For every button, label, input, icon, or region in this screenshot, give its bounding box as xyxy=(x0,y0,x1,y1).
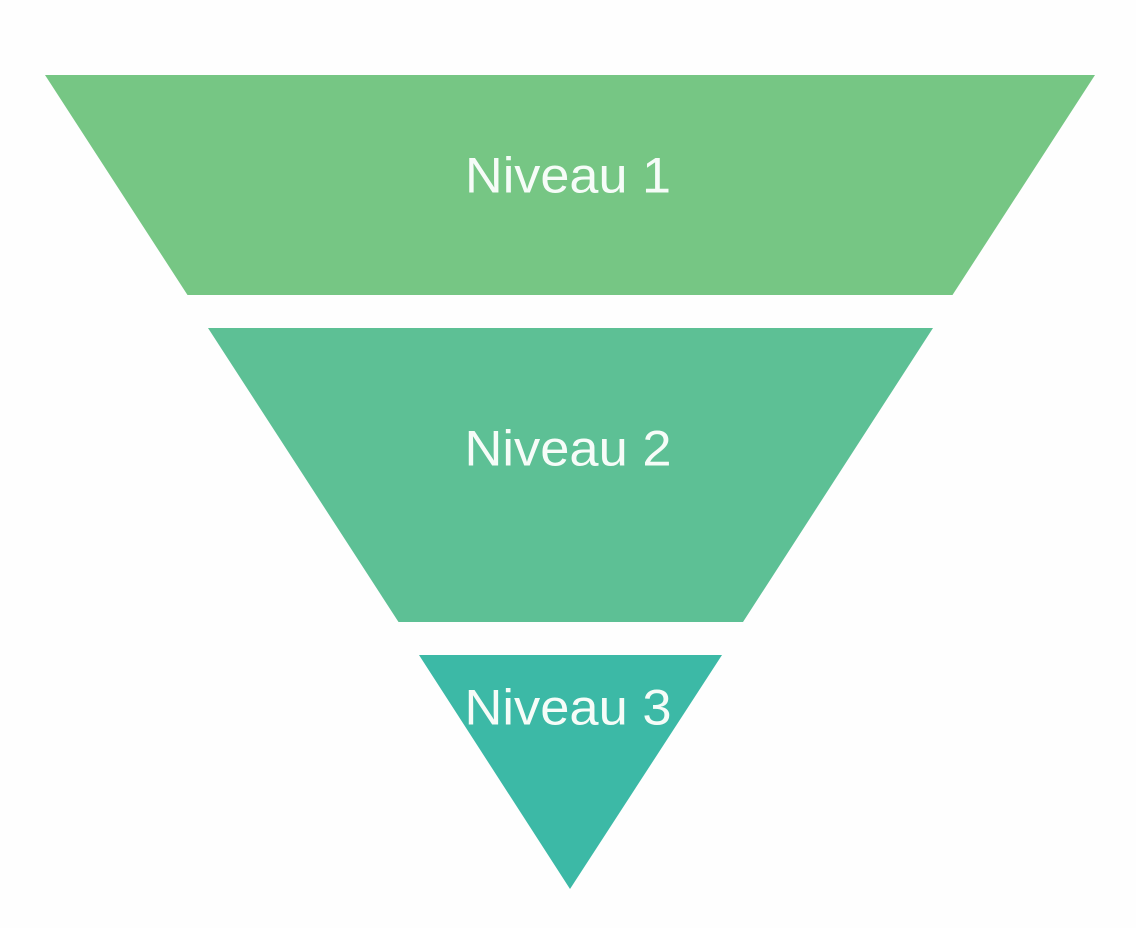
level 3 segment: Niveau 3 xyxy=(464,680,672,736)
level 3 segment xyxy=(419,655,722,889)
level 1 segment xyxy=(45,75,1095,295)
level 2 segment xyxy=(208,328,933,622)
level 1 segment: Niveau 1 xyxy=(465,148,671,204)
level 2 segment: Niveau 2 xyxy=(464,420,672,476)
